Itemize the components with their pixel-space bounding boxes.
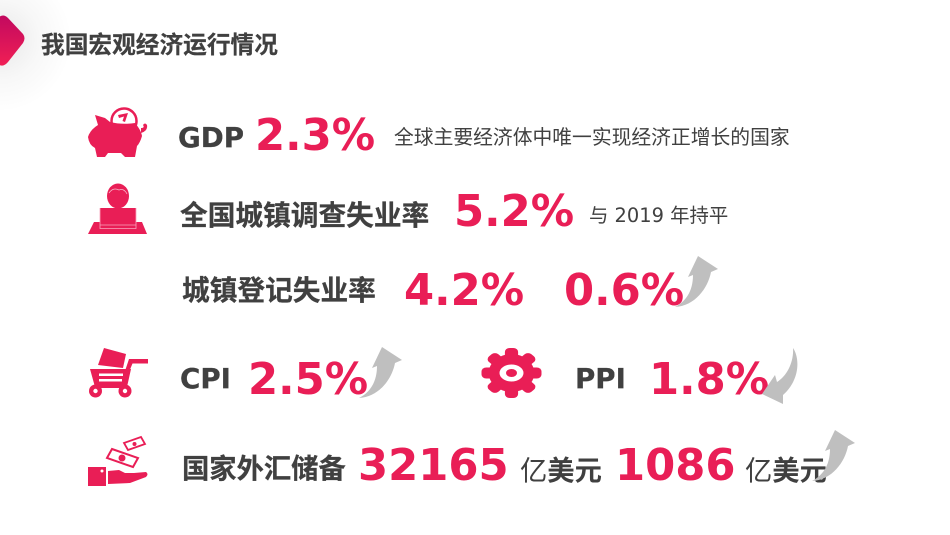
header tab marker	[0, 0, 72, 112]
value: surveyed unemployment: 5.2%	[454, 187, 574, 237]
icon: shopping cart	[89, 348, 148, 398]
value: registered unemployment change: 0.6%	[564, 266, 684, 316]
foreign reserves row	[88, 430, 855, 491]
value: PPI: 1.8%	[649, 355, 769, 405]
value: reserves change: 1086	[615, 441, 736, 491]
label: CPI: CPI	[180, 362, 231, 395]
arrow: up	[675, 256, 718, 307]
label: PPI: PPI	[575, 362, 626, 395]
GDP row	[88, 108, 790, 161]
value: reserves: 32165	[358, 441, 509, 491]
label: surveyed unemployment: 全国城镇调查失业率	[180, 199, 429, 232]
label: GDP: GDP	[178, 121, 244, 154]
label: foreign reserves: 国家外汇储备	[182, 454, 346, 485]
unit: reserves: 亿美元	[520, 456, 602, 487]
arrow: up	[812, 430, 855, 481]
value: CPI: 2.5%	[248, 355, 368, 405]
icon: person at laptop	[88, 184, 147, 234]
registered unemployment row	[182, 256, 718, 316]
note: GDP: 全球主要经济体中唯一实现经济正增长的国家	[394, 126, 790, 149]
PPI block	[482, 348, 797, 405]
icon: gear	[482, 348, 542, 398]
label: registered unemployment: 城镇登记失业率	[182, 274, 376, 307]
arrow: up	[359, 347, 402, 398]
icon: piggy bank	[88, 108, 147, 157]
title: 我国宏观经济运行情况	[41, 31, 278, 59]
CPI block	[89, 347, 402, 405]
unemployment row	[88, 184, 728, 237]
icon: hand with money	[88, 437, 148, 486]
value: GDP growth: 2.3%	[255, 111, 375, 161]
note: surveyed unemployment: 与 2019 年持平	[589, 204, 728, 227]
value: registered unemployment: 4.2%	[404, 266, 524, 316]
arrow: down	[762, 348, 797, 404]
unit: reserves change: 亿美元	[745, 456, 827, 487]
